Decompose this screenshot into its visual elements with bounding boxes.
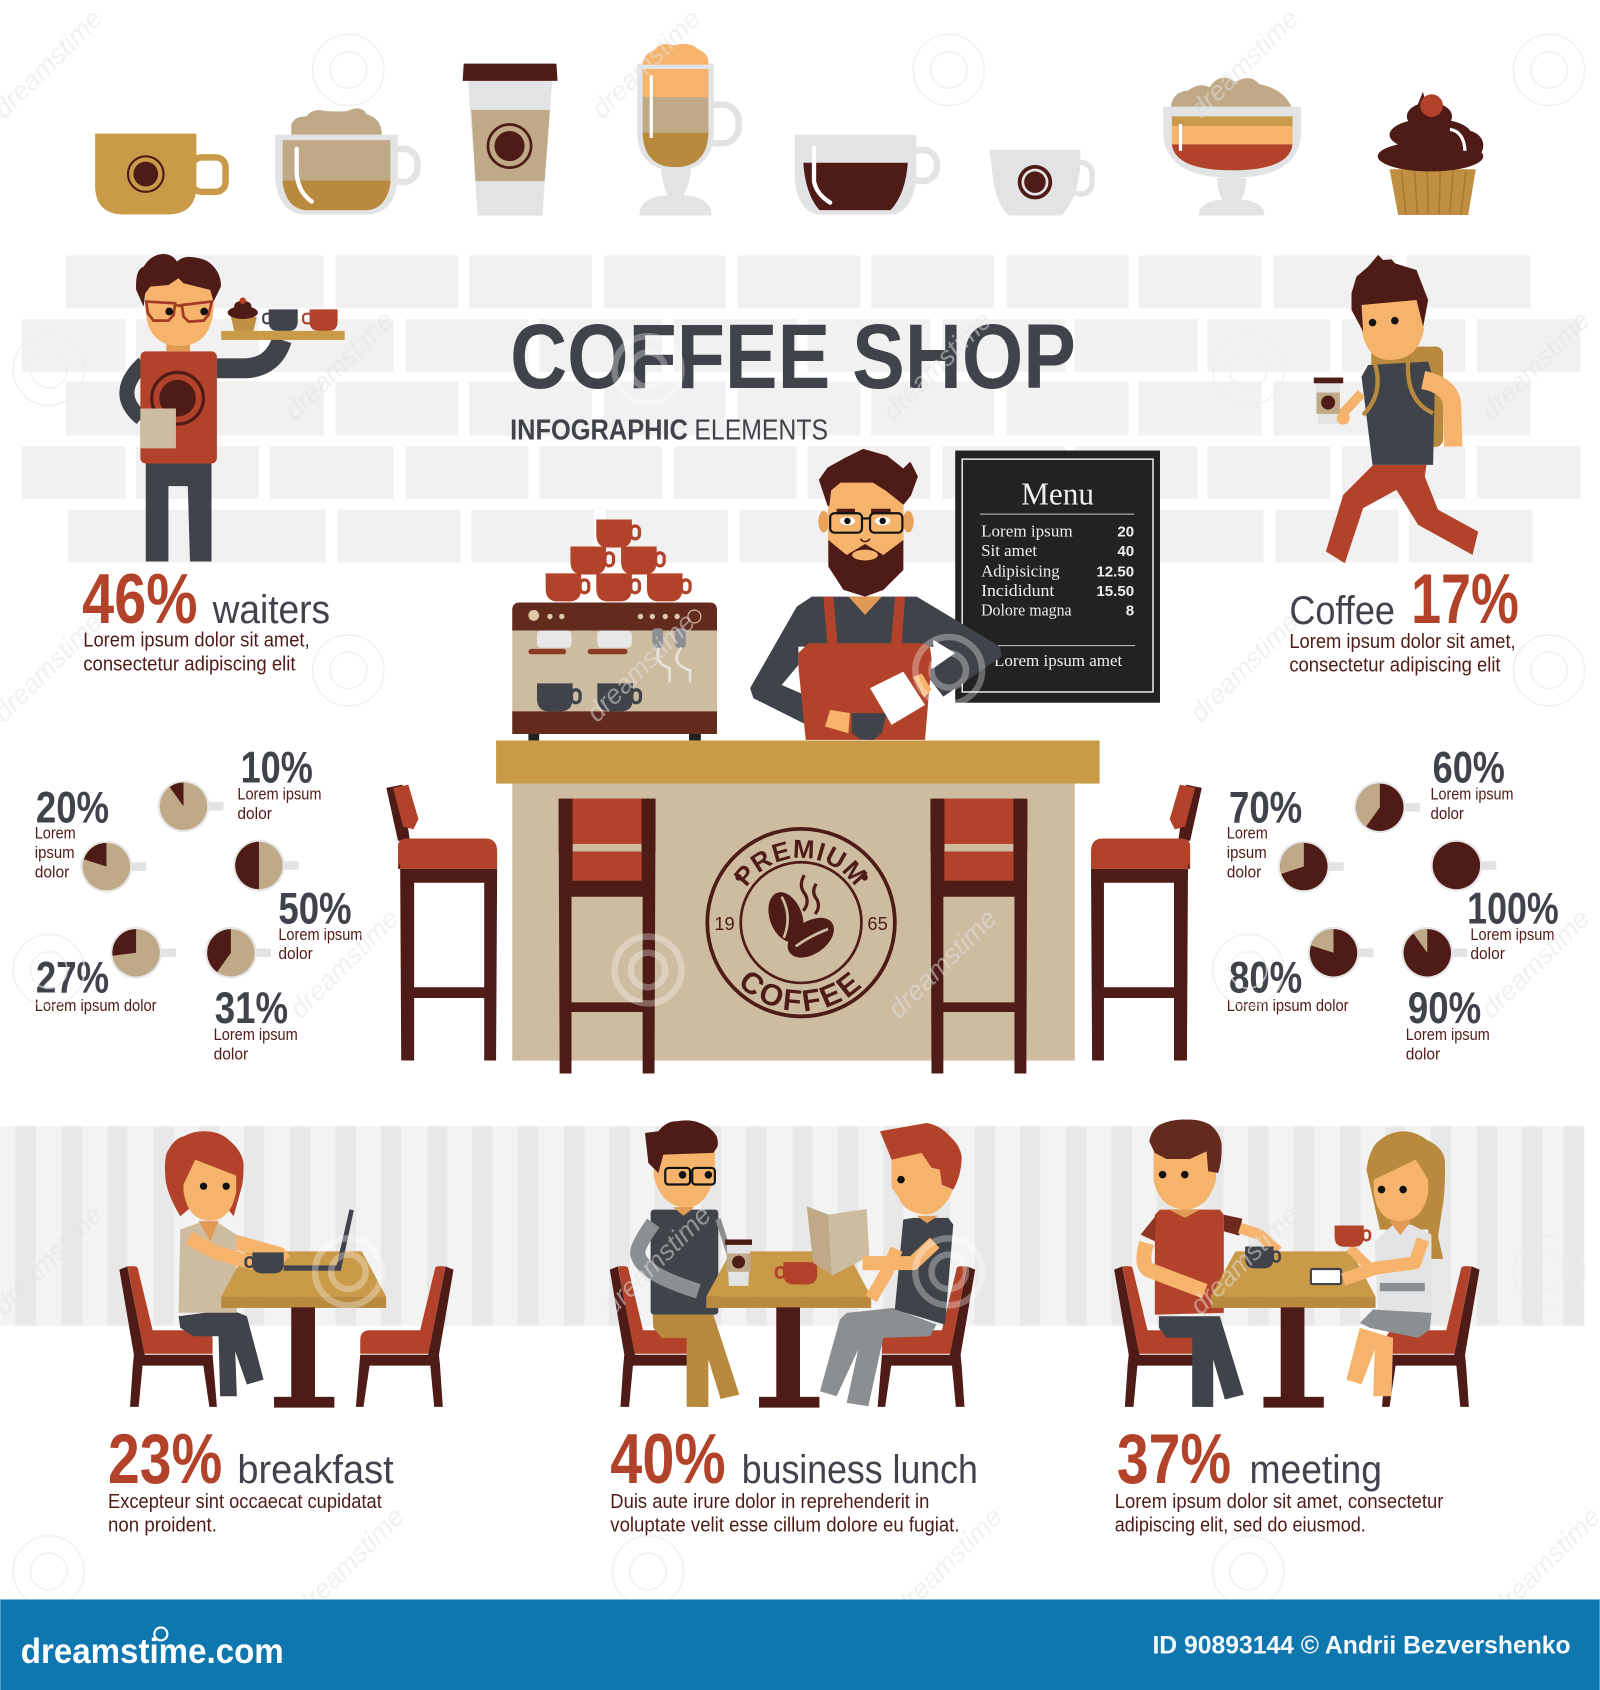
woman arms [236,1235,290,1263]
icon: takeaway cup [463,64,557,216]
pie labels: left: Lorem ipsum dolor [35,996,157,1015]
striped wall band [0,1126,1585,1326]
icon: black coffee cup [795,135,937,214]
waiter head [166,341,190,351]
apron [798,597,932,740]
stat: waiters [82,560,330,675]
watermark text: dreamstime [596,1200,717,1320]
menu board: 12.50 [1096,564,1134,581]
menu board: Menu [1021,476,1094,511]
woman face [183,1160,236,1221]
scene: business lunch [610,1120,975,1408]
premium coffee logo: COFFEE [742,972,862,1012]
woman pants [179,1310,264,1396]
pie labels: right: Lorem ipsum [1406,1025,1490,1044]
figure: barista [750,450,1002,740]
waiter torso [140,351,217,463]
subtitle: ELEMENTS [694,415,828,447]
icon: espresso cup [990,150,1092,216]
footer spiral [154,1627,167,1640]
menu board: 20 [1117,524,1134,541]
chairs [119,1266,217,1407]
70% cup [1278,841,1344,892]
pie labels: left: 10% [241,743,313,792]
menu board: Sit amet [981,541,1037,560]
watermark text: dreamstime [1184,3,1305,124]
waiter legs [146,462,212,562]
90% cup [1401,927,1467,979]
premium coffee logo [705,827,897,1018]
watermark text: dreamstime [1184,607,1305,728]
stat: waiters: waiters [212,588,330,632]
stat: coffee: consectetur adipiscing elit [1289,653,1501,676]
pie labels: left: 20% [36,783,109,832]
stat: business lunch: business lunch [742,1448,978,1492]
watermark text: dreamstime [586,3,706,124]
pie labels: left: Lorem [35,824,76,843]
subtitle: INFOGRAPHIC [510,415,688,447]
chairs [1114,1266,1212,1407]
pie labels: right: 70% [1229,783,1302,832]
pie chart group: left cups [81,780,299,979]
pie labels: right [1227,743,1559,1063]
figure: walking man with backpack [1314,255,1478,563]
27% cup [110,927,176,979]
pie labels: right: Lorem ipsum dolor [1227,996,1349,1015]
bar stool: front right [930,799,1027,1073]
takeaway cup and red cup [727,1245,750,1286]
stat: business lunch [610,1420,978,1537]
man shirt [1141,1209,1242,1315]
stat: breakfast: 23% [108,1420,222,1498]
pie labels: left: dolor [237,804,272,823]
pie labels: right: Lorem ipsum [1470,925,1554,944]
ears and face [818,511,829,532]
barista shirt and arms [750,597,1002,733]
20% cup [81,841,146,892]
watermark rings over artwork [315,336,982,1305]
stat: meeting: 37% [1117,1420,1231,1498]
pie labels: right: dolor [1227,862,1262,881]
pie labels: left: 27% [36,954,109,1003]
man with glasses [638,1120,733,1315]
torso [1362,362,1435,465]
pie labels: left: 50% [278,885,352,934]
pie labels: left: Lorem ipsum [237,785,321,804]
pie labels: right: Lorem [1227,824,1268,843]
menu board: Lorem ipsum amet [994,651,1123,670]
stat: meeting: Lorem ipsum dolor sit amet, consectetur [1115,1490,1444,1513]
table [706,1251,871,1408]
stat: waiters: 46% [82,560,198,638]
menu board: Dolore magna [981,600,1072,619]
tan pants [653,1315,739,1407]
icon: latte glass [637,44,739,216]
tray with cupcake and cups [221,331,345,340]
title: COFFEE SHOP [510,306,1076,408]
pie labels: left: dolor [214,1044,249,1063]
stat: breakfast: Excepteur sint occaecat cupidatat [108,1490,382,1513]
figure: waiter with tray [127,254,345,562]
watermark text: dreamstime [887,1501,1008,1622]
pie labels: left [35,743,362,1063]
pie labels: left: Lorem ipsum [214,1025,298,1044]
watermark text: dreamstime [278,305,399,426]
woman hair [165,1131,244,1216]
watermark text: dreamstime [289,1501,410,1622]
scene: woman with laptop at breakfast [119,1131,453,1408]
premium coffee logo: PREMIUM [734,840,868,886]
espresso machine [512,602,717,740]
menu board: Adipisicing [981,562,1060,581]
pie labels: left: dolor [278,944,313,963]
stat: waiters: consectetur adipiscing elit [83,652,296,675]
pie labels: right: dolor [1470,944,1505,963]
menu board: Lorem ipsum [981,522,1073,541]
icon: gold mug [95,134,226,214]
scene: meeting [1114,1120,1480,1408]
menu board: 40 [1117,543,1134,560]
icon: cappuccino glass [275,108,417,214]
stat: meeting [1115,1420,1444,1537]
menu board: Incididunt [981,581,1055,600]
bar stool: front left [559,799,656,1073]
icon row: coffee drinks [95,44,1483,216]
pie labels: right: 80% [1229,954,1302,1003]
stat: coffee [1289,560,1519,676]
stat: coffee: Coffee [1289,589,1395,633]
man arms and head [1144,1120,1278,1291]
bar stool: far left [386,785,497,1061]
table [221,1251,386,1408]
icon: cupcake [1378,92,1483,215]
collar [848,597,882,615]
stat: coffee: Lorem ipsum dolor sit amet, [1289,630,1516,653]
subtitle [510,415,828,447]
pie labels: right: 60% [1433,743,1505,792]
premium coffee logo: 65 [867,913,888,934]
legs [1326,465,1478,563]
10% cup [158,780,223,832]
pie labels: right: 100% [1467,885,1559,934]
eyebrows, eyes and glasses [837,509,891,513]
menu board: 15.50 [1096,583,1134,600]
footer bar [0,1599,1600,1690]
menu board: 8 [1126,602,1134,619]
pie labels: left: ipsum [35,843,75,862]
beard [828,540,903,597]
stat: meeting: adipiscing elit, sed do eiusmod. [1115,1514,1366,1537]
takeaway cup [1316,383,1341,424]
chairs [610,1266,707,1407]
watermark text: dreamstime [877,305,997,426]
footer logo: dreamstime.com [21,1631,284,1671]
bar stool: far right [1091,785,1202,1061]
80% cup [1308,927,1373,979]
stat: coffee: 17% [1411,560,1519,638]
pie chart group: right cups [1278,781,1496,979]
pie labels: right: 90% [1408,984,1481,1033]
cup, hands, pitcher [852,713,887,740]
icon: layered dessert glass [1163,78,1301,216]
pie labels: left: 31% [215,984,288,1033]
31% cup [205,927,271,979]
watermark text: dreamstime [1475,903,1596,1024]
stacked red cups [546,520,690,601]
pie labels: right: dolor [1431,804,1464,823]
stat: waiters: Lorem ipsum dolor sit amet, [83,629,310,652]
man reading menu [807,1123,962,1325]
bar counter [496,740,1100,1061]
arms [1423,380,1453,447]
man pants [1159,1316,1244,1407]
watermark text: dreamstime [284,903,405,1024]
backpack [1371,347,1443,447]
pie labels: right: ipsum [1227,843,1267,862]
watermark text: dreamstime [1475,305,1596,426]
stat: breakfast [108,1420,394,1537]
menu board [955,451,1160,703]
stat: business lunch: Duis aute irure dolor in reprehenderit in [610,1490,929,1513]
pie labels: right: dolor [1406,1044,1441,1063]
laptop [284,1209,354,1271]
stat: business lunch: voluptate velit esse cillum dolore eu fugiat. [610,1514,960,1537]
pie labels: left: dolor [35,862,70,881]
gray pants [820,1308,937,1406]
100% cup [1431,840,1496,891]
pie labels: left: Lorem ipsum [278,925,362,944]
stat: meeting: meeting [1249,1448,1382,1492]
hair [820,450,917,505]
watermark text: dreamstime [580,607,701,728]
stat: business lunch: 40% [610,1420,726,1498]
premium coffee logo: 19 [714,913,735,934]
woman [1343,1131,1445,1396]
brick wall [22,255,1580,563]
pie labels: right: Lorem ipsum [1431,785,1514,804]
stat: breakfast: non proident. [108,1514,217,1537]
table [1211,1251,1376,1408]
footer credit: ID 90893144 © Andrii Bezvershenko [1152,1632,1571,1659]
50% cup [233,840,299,891]
dark cup and phone [1245,1246,1280,1268]
red cup [1335,1225,1370,1247]
watermark text: dreamstime [1184,1200,1305,1320]
60% cup [1354,781,1420,833]
watermark text: dreamstime [882,903,1003,1024]
waiter arms [127,363,144,418]
cup [246,1252,284,1273]
stat: breakfast: breakfast [237,1448,394,1492]
head [1362,299,1424,360]
woman torso [179,1223,237,1313]
